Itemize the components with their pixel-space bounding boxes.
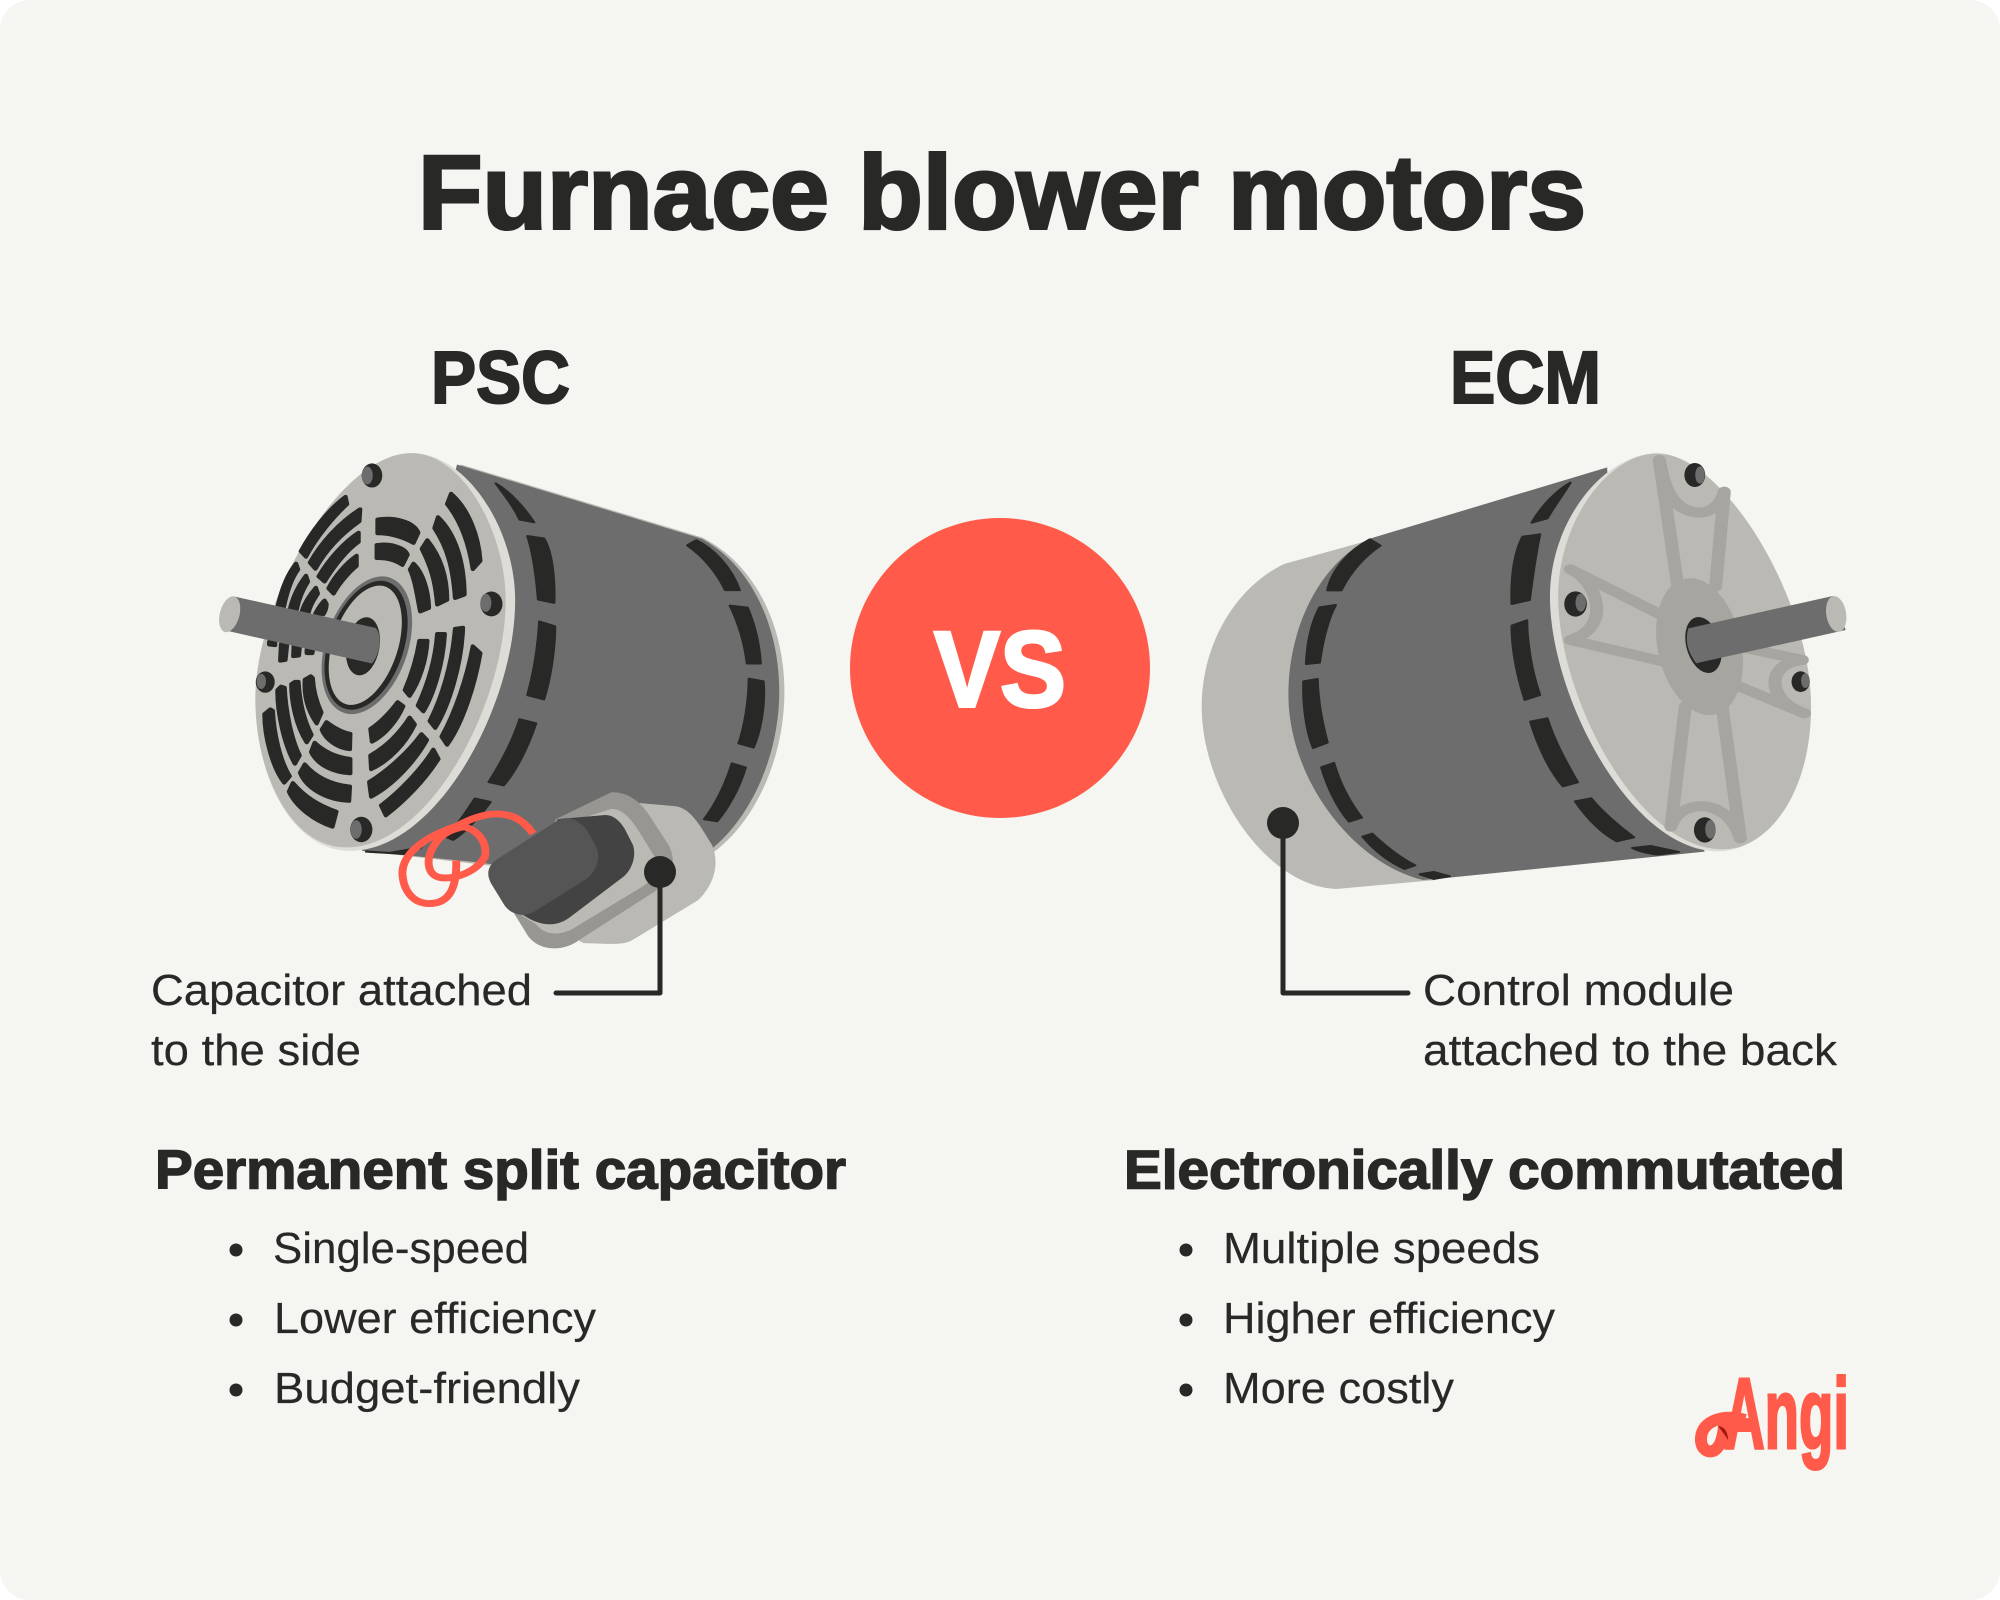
subheading: electronically commutated: Electronically commutated bbox=[1124, 1138, 1845, 1200]
logo: Angi: Angi bbox=[1724, 1358, 1849, 1470]
caption: control module: attached to the back bbox=[1423, 1026, 1838, 1075]
ECM bullet list: Multiple speeds bbox=[1223, 1224, 1540, 1273]
front plate rim bbox=[255, 453, 515, 851]
illustration: PSC motor bbox=[216, 453, 784, 948]
logo: Angi bbox=[1701, 1358, 1849, 1470]
caption: control module: Control module bbox=[1423, 966, 1734, 1015]
back plate bbox=[1558, 453, 1811, 849]
hub bbox=[1645, 574, 1754, 719]
capacitor bbox=[488, 792, 716, 948]
VS badge bbox=[850, 518, 1150, 818]
motor body bbox=[362, 464, 779, 878]
front plate bbox=[255, 453, 506, 847]
motor body bbox=[1288, 467, 1705, 880]
body vent slots bbox=[366, 483, 764, 854]
shaft hole bbox=[1680, 615, 1727, 675]
control module bbox=[1202, 537, 1436, 889]
VS badge: VS bbox=[934, 608, 1066, 730]
ECM bullet list: More costly bbox=[1223, 1364, 1454, 1413]
shaft bbox=[216, 595, 380, 664]
red wires bbox=[402, 814, 533, 904]
heading: PSC: PSC bbox=[431, 336, 570, 419]
callout line: control module bbox=[1267, 807, 1408, 993]
caption: control module bbox=[1423, 966, 1838, 1075]
ECM bullet list: Higher efficiency bbox=[1223, 1294, 1555, 1343]
caption: capacitor: Capacitor attached bbox=[151, 966, 532, 1015]
title: Furnace blower motors bbox=[418, 134, 1586, 252]
plate struts bbox=[1570, 460, 1805, 838]
ECM bullet list bbox=[1180, 1224, 1555, 1413]
centre bearing ring bbox=[306, 568, 428, 723]
front plate slots bbox=[264, 494, 480, 827]
callout line: capacitor bbox=[556, 856, 676, 993]
mounting screws bbox=[1564, 463, 1810, 843]
subheading: permanent split capacitor: Permanent split capacitor bbox=[155, 1138, 846, 1200]
PSC bullet list bbox=[230, 1224, 596, 1413]
plate rim bbox=[1550, 453, 1811, 851]
heading: ECM: ECM bbox=[1450, 336, 1601, 419]
illustration: ECM motor bbox=[1202, 453, 1849, 889]
PSC bullet list: Single-speed bbox=[273, 1224, 529, 1273]
PSC bullet list: Lower efficiency bbox=[274, 1294, 596, 1343]
caption: capacitor bbox=[151, 966, 532, 1075]
body vent slots bbox=[1303, 483, 1679, 879]
PSC bullet list: Budget-friendly bbox=[274, 1364, 580, 1413]
shaft bbox=[1687, 595, 1849, 663]
caption: capacitor: to the side bbox=[151, 1026, 361, 1075]
motor back edge bbox=[362, 464, 784, 878]
mounting screws bbox=[256, 463, 502, 842]
